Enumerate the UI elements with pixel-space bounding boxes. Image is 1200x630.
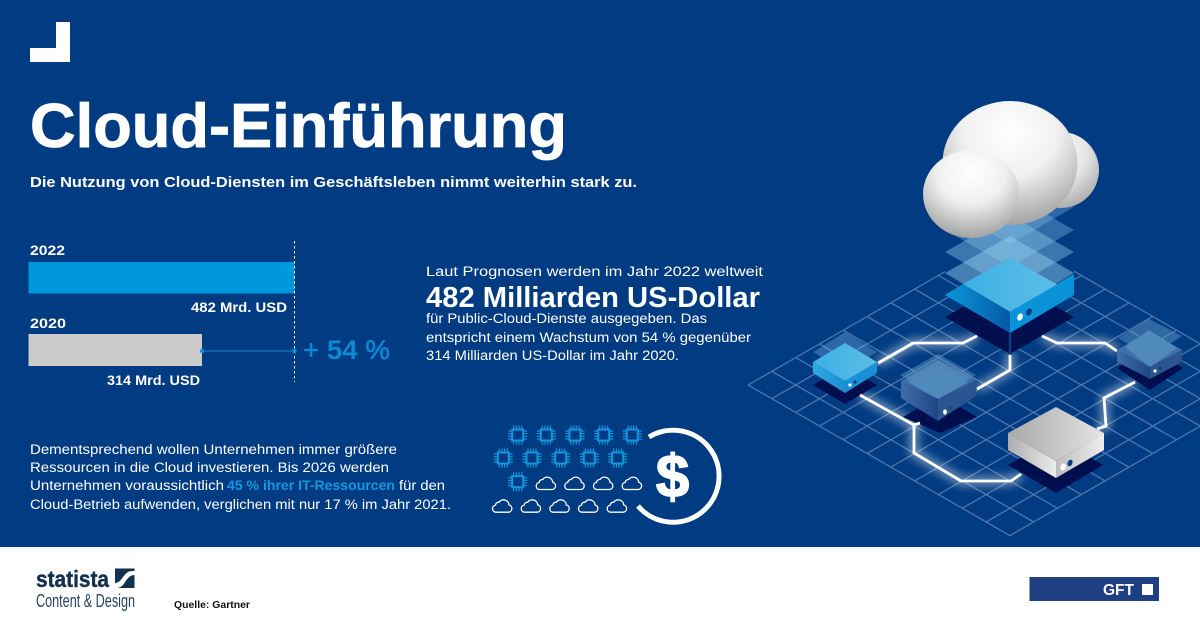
highlight: 482 Milliarden US-Dollar: 482 Milliarden US-Dollar — [426, 282, 760, 314]
growth value: + 54 % — [303, 335, 390, 365]
faint line under main server — [1009, 333, 1011, 354]
isometric network illustration — [748, 101, 1200, 536]
value: 482 Mrd. USD: 482 Mrd. USD — [191, 300, 287, 315]
panel: white footer — [0, 547, 1200, 630]
logo: statista Content & Design: Content & Design — [36, 591, 135, 611]
server: main blue — [945, 170, 1074, 333]
bar chart: cloud spending 2022 vs 2020 — [28, 241, 390, 388]
bar label: 2020: 2020 — [30, 315, 66, 331]
text block: investment outlook — [30, 442, 451, 512]
text block: forecast: Laut Prognosen werden im Jahr 2022 weltweit — [426, 264, 763, 279]
text block: investment outlook: für den — [399, 478, 445, 493]
isometric grid — [748, 234, 1200, 536]
icon group: chips and clouds — [492, 426, 642, 512]
server: dark blue right — [1117, 319, 1182, 379]
bar: 2022 — [28, 262, 294, 294]
text block: investment outlook: Unternehmen voraussichtlich — [30, 478, 224, 493]
icon: dollar ring: $ — [656, 443, 689, 510]
connection lines — [860, 336, 1135, 481]
server shadows — [813, 280, 1183, 493]
text block: forecast: für Public-Cloud-Dienste ausgegeben. Das — [426, 311, 707, 326]
growth connector — [200, 349, 297, 353]
highlight: 45 % ihrer IT-Ressourcen: 45 % ihrer IT-Ressourcen — [227, 478, 395, 493]
icon: statista mark — [115, 568, 134, 588]
bar: 2020 — [28, 334, 202, 366]
text block: investment outlook: Ressourcen in die Cloud investieren. Bis 2026 werden — [30, 460, 389, 475]
bar label: 2022: 2022 — [30, 242, 65, 258]
text block: investment outlook: Dementsprechend wollen Unternehmen immer größere — [30, 442, 397, 457]
title: Cloud-Einführung — [30, 92, 567, 161]
server: dark blue middle — [900, 354, 976, 421]
glow behind connections — [860, 336, 1135, 481]
icon: corner bracket logo — [30, 22, 70, 62]
subtitle: Die Nutzung von Cloud-Diensten im Geschäftsleben nimmt weiterhin stark zu. — [30, 174, 637, 191]
logo: GFT: GFT — [1103, 582, 1135, 599]
logo: GFT — [1030, 577, 1159, 601]
logo: statista Content & Design — [36, 566, 135, 611]
dashed reference line — [294, 241, 296, 382]
text block: forecast: entspricht einem Wachstum von 54 % gegenüber — [426, 330, 752, 345]
logo: statista Content & Design: statista — [36, 566, 109, 592]
text block: investment outlook: Cloud-Betrieb aufwenden, verglichen mit nur 17 % im Jahr 2021. — [30, 497, 451, 512]
text block: forecast: 314 Milliarden US-Dollar im Jahr 2020. — [426, 348, 679, 363]
value: 314 Mrd. USD: 314 Mrd. USD — [107, 373, 200, 388]
cloud — [923, 101, 1099, 238]
server: light blue left — [813, 332, 877, 393]
icon: dollar ring — [638, 430, 719, 522]
server: silver — [1008, 407, 1104, 478]
text block: forecast — [426, 264, 763, 363]
source note: Quelle: Gartner — [174, 600, 250, 611]
